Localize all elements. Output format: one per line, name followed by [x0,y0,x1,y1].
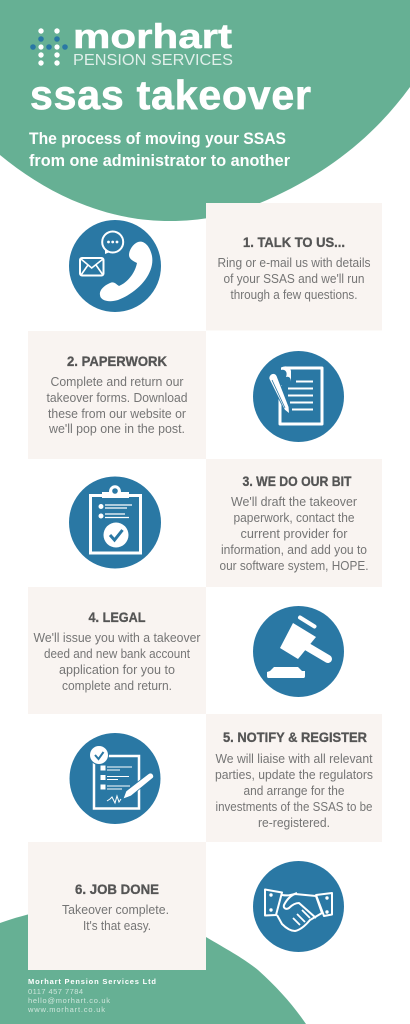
text: step 6: It's that easy. [83,919,151,933]
footer contact details: hello@morhart.co.uk [28,996,110,1005]
text: step 2: Complete and return our [50,375,184,389]
text: step 3: information, and add you to [221,543,367,557]
text: step 4: deed and new bank account [44,647,190,661]
icon: gavel [253,606,344,697]
text: step 4: application for you to [59,663,175,677]
footer contact details: www.morhart.co.uk [27,1005,105,1014]
panel: step 4 [28,587,206,714]
text: step 5: We will liaise with all relevant [216,752,373,766]
bottom green footer shape [0,906,306,1024]
text: step 4: We'll issue you with a takeover [34,631,200,645]
text: step 6 [62,903,169,933]
text: step 2: takeover forms. Download [46,391,188,405]
icon: signed checklist and pen [70,733,160,824]
top green header shape [0,0,410,221]
text: step 3: current provider for [240,527,348,541]
text: step 3: We'll draft the takeover [231,495,357,509]
panel: step 3 [206,459,382,587]
icon: phone, message and envelope [69,220,161,312]
heading: step 4: 4. LEGAL [88,610,146,625]
text: step 1 [218,256,370,302]
text: step 2 [46,375,188,436]
text: step 3: paperwork, contact the [234,511,355,525]
logo mark dots [30,28,68,66]
title: ssas takeover [30,72,311,118]
heading: step 5: 5. NOTIFY & REGISTER [223,730,367,745]
icon: clipboard with check [69,476,161,568]
text: step 5: and arrange for the [244,784,345,798]
footer contact details [27,977,156,1014]
text: step 3 [220,495,368,573]
text: step 6: Takeover complete. [62,903,169,917]
text: step 4: complete and return. [62,679,172,693]
heading: step 2: 2. PAPERWORK [67,354,167,369]
icon: handshake [253,861,344,952]
text: step 1: of your SSAS and we'll run [224,272,365,286]
logo wordmark: morhart [73,18,232,56]
text: step 5 [215,752,373,830]
panel: step 1 [206,203,382,330]
panel: step 2 [28,331,206,459]
footer contact details: 0117 457 7784 [28,987,83,996]
text: step 4 [34,631,200,693]
heading: step 6: 6. JOB DONE [75,882,159,897]
logo [30,18,233,69]
text: step 5: parties, update the regulators [215,768,373,782]
subtitle: The process of moving your SSAS [29,130,286,148]
text: step 5: re-registered. [258,816,330,830]
heading: step 1: 1. TALK TO US... [243,235,345,250]
icon: document and pen [253,351,344,442]
subtitle [29,130,291,170]
text: step 5: investments of the SSAS to be [216,800,373,814]
text: step 2: we'll pop one in the post. [48,422,185,436]
panel: step 6 [28,842,206,970]
text: step 2: these from our website or [48,407,186,421]
text: step 1: Ring or e-mail us with details [218,256,370,270]
footer contact details: Morhart Pension Services Ltd [28,977,156,986]
heading: step 3: 3. WE DO OUR BIT [242,474,352,489]
panel: step 5 [206,714,382,842]
text: step 3: our software system, HOPE. [220,559,368,573]
logo subtitle: PENSION SERVICES [73,52,233,69]
subtitle: from one administrator to another [29,152,291,170]
text: step 1: through a few questions. [230,288,358,302]
